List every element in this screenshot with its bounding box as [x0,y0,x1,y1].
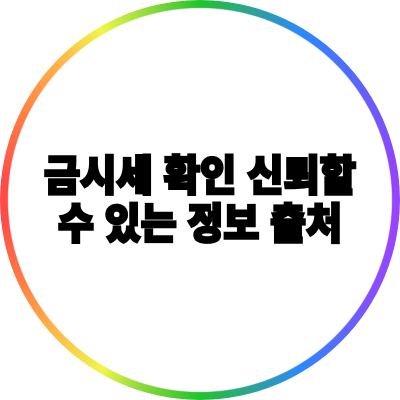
title: 수 있는 정보 출처 [58,200,342,248]
title: 금시세 확인 신뢰할 [44,152,356,200]
